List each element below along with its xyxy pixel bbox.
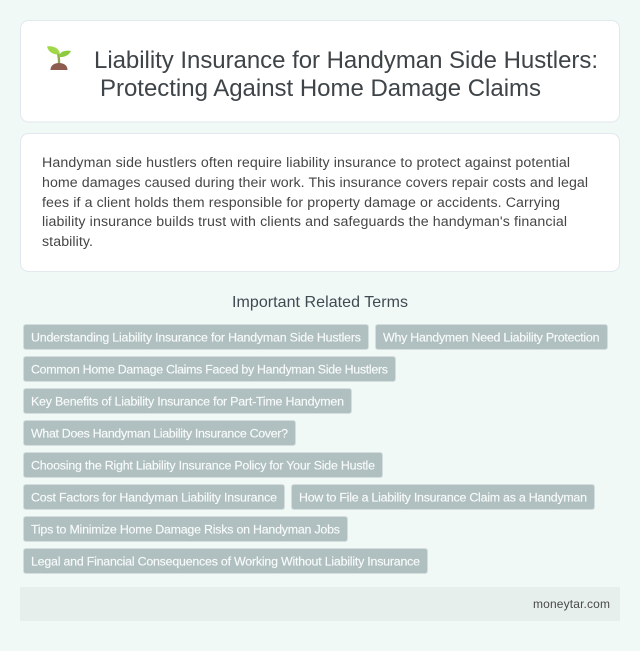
tag: key benefits: Key Benefits of Liability Insurance for Part-Time Handymen xyxy=(31,394,344,408)
tag: common claims: Common Home Damage Claims Faced by Handyman Side Hustlers xyxy=(31,362,388,376)
tag: cost factors xyxy=(24,484,284,510)
title: Liability Insurance for Handyman Side Hustlers: xyxy=(94,47,598,74)
text block: description: stability. xyxy=(42,234,93,250)
tag: what it covers xyxy=(24,420,296,446)
panel: title card xyxy=(20,20,620,122)
tag: minimize risks: Tips to Minimize Home Damage Risks on Handyman Jobs xyxy=(31,522,340,536)
tag: understanding xyxy=(24,324,368,350)
tag: common claims xyxy=(24,356,396,382)
text block: description: Handyman side hustlers often require liability insurance to protect against potential xyxy=(42,155,570,171)
tag list xyxy=(24,324,608,574)
tag: filing a claim: How to File a Liability Insurance Claim as a Handyman xyxy=(299,490,587,504)
tag: understanding: Understanding Liability Insurance for Handyman Side Hustlers xyxy=(31,330,361,344)
tag: choosing policy: Choosing the Right Liability Insurance Policy for Your Side Hustle xyxy=(31,458,375,472)
text block: description: liability insurance builds trust with clients and safeguards the handyman's financial xyxy=(42,214,567,230)
footer xyxy=(20,587,620,621)
tag: filing a claim xyxy=(292,484,594,510)
icon: seedling xyxy=(47,46,71,70)
text block: description xyxy=(42,155,588,250)
tag: what it covers: What Does Handyman Liability Insurance Cover? xyxy=(31,426,288,440)
title: Protecting Against Home Damage Claims xyxy=(100,75,541,102)
tag: minimize risks xyxy=(24,516,348,542)
panel: description card xyxy=(20,134,620,272)
tag: why xyxy=(376,324,608,350)
tag: consequences xyxy=(24,548,428,574)
tag: cost factors: Cost Factors for Handyman Liability Insurance xyxy=(31,490,277,504)
heading: related terms: Important Related Terms xyxy=(232,294,408,311)
tag: key benefits xyxy=(24,388,352,414)
text block: description: fees if a client holds them responsible for property damage or accidents. Carrying xyxy=(42,195,560,211)
text block: description: home damages caused during their work. This insurance covers repair costs and legal xyxy=(42,175,588,191)
title xyxy=(94,47,598,102)
footer source: moneytar.com xyxy=(533,597,610,611)
tag: choosing policy xyxy=(24,452,382,478)
tag: consequences: Legal and Financial Consequences of Working Without Liability Insurance xyxy=(31,554,420,568)
tag: why: Why Handymen Need Liability Protection xyxy=(383,330,600,344)
